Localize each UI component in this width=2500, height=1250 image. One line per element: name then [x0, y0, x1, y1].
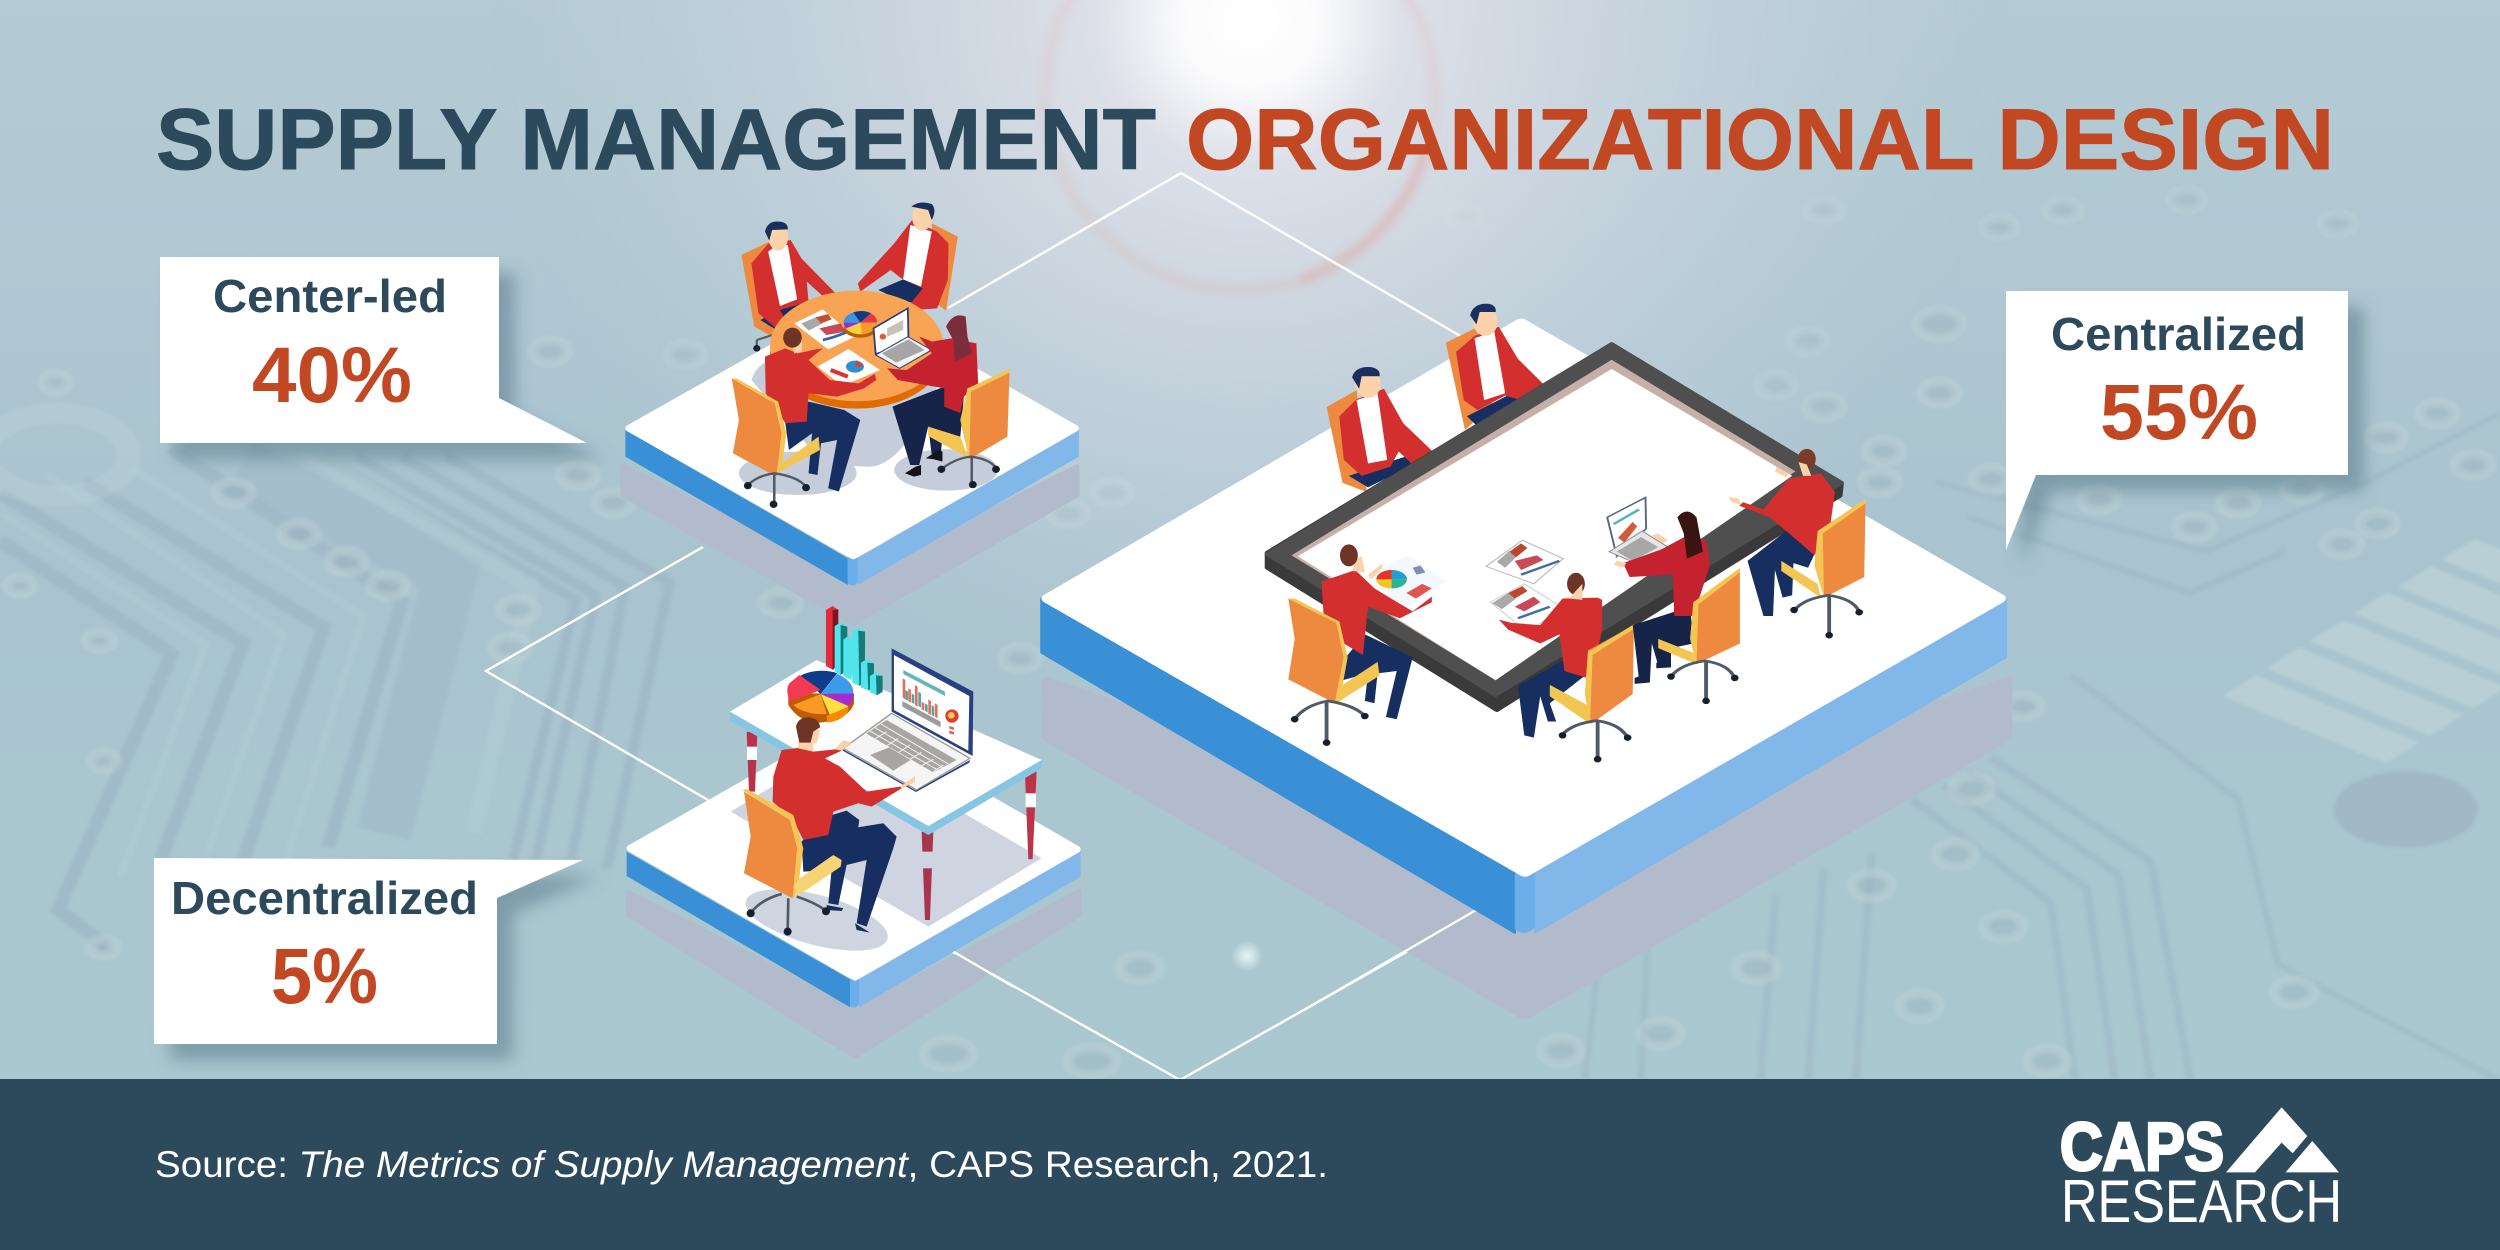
- callout: center-led 40%: 40%: [252, 330, 412, 419]
- scene: decentralized platform and desk: [627, 606, 1081, 1057]
- title: [156, 92, 2334, 188]
- logo: CAPS Research: CAPS: [2060, 1109, 2224, 1185]
- callout: decentralized 5%: [154, 858, 583, 1044]
- platform: center-led: [623, 302, 1079, 623]
- person: woman: [887, 315, 1010, 488]
- person: far right: [1728, 449, 1866, 638]
- person: woman: [1614, 512, 1740, 704]
- person: back seat 1: [1327, 367, 1432, 492]
- source note: Source: The Metrics of Supply Management , CAPS Research, 2021.: [155, 1144, 1328, 1185]
- desk: [730, 660, 1042, 920]
- round table: [770, 291, 944, 409]
- person: front left: [1288, 544, 1432, 746]
- scene: center-led platform and round table: [623, 202, 1079, 623]
- callout: centralized 55%: Centralized: [2051, 308, 2306, 360]
- callout: center-led 40%: [160, 257, 587, 443]
- connector lines: white diamond outline: [486, 173, 1484, 1080]
- documents on table: [794, 309, 880, 386]
- laptop: [874, 308, 932, 368]
- person: front left: [732, 328, 876, 508]
- laptop: [1607, 498, 1672, 565]
- person: front centre: [1499, 573, 1634, 762]
- icon: mountain peaks: [2226, 1107, 2339, 1172]
- person: back left: [741, 221, 847, 352]
- person: back right: [858, 202, 958, 311]
- pie chart: [844, 311, 877, 338]
- long table: [1267, 344, 1841, 710]
- document with pie chart: [1365, 555, 1446, 608]
- callout: centralized 55%: [2006, 291, 2348, 550]
- bar chart icon: [826, 606, 883, 695]
- callout: centralized 55%: 55%: [2100, 367, 2258, 456]
- scene: centralized platform and long table: [1041, 304, 2008, 1017]
- logo: CAPS Research: RESEARCH: [2061, 1168, 2342, 1235]
- footer bar: [0, 1079, 2500, 1250]
- document: report sheets: [1486, 540, 1563, 632]
- pie chart icon: [787, 671, 854, 723]
- laptop: [843, 648, 973, 792]
- callout: decentralized 5%: Decentralized: [171, 872, 478, 924]
- platform: centralized: [1041, 323, 2008, 1017]
- callout: decentralized 5%: 5%: [271, 931, 378, 1020]
- person: back seat 2: [1446, 304, 1543, 430]
- title: ORGANIZATIONAL DESIGN: [1186, 92, 2334, 188]
- title: SUPPLY MANAGEMENT: [156, 92, 1156, 188]
- platform: decentralized: [627, 721, 1081, 1057]
- person at desk: [742, 717, 915, 936]
- callout: center-led 40%: Center-led: [213, 270, 447, 322]
- logo: CAPS Research: [2060, 1107, 2342, 1235]
